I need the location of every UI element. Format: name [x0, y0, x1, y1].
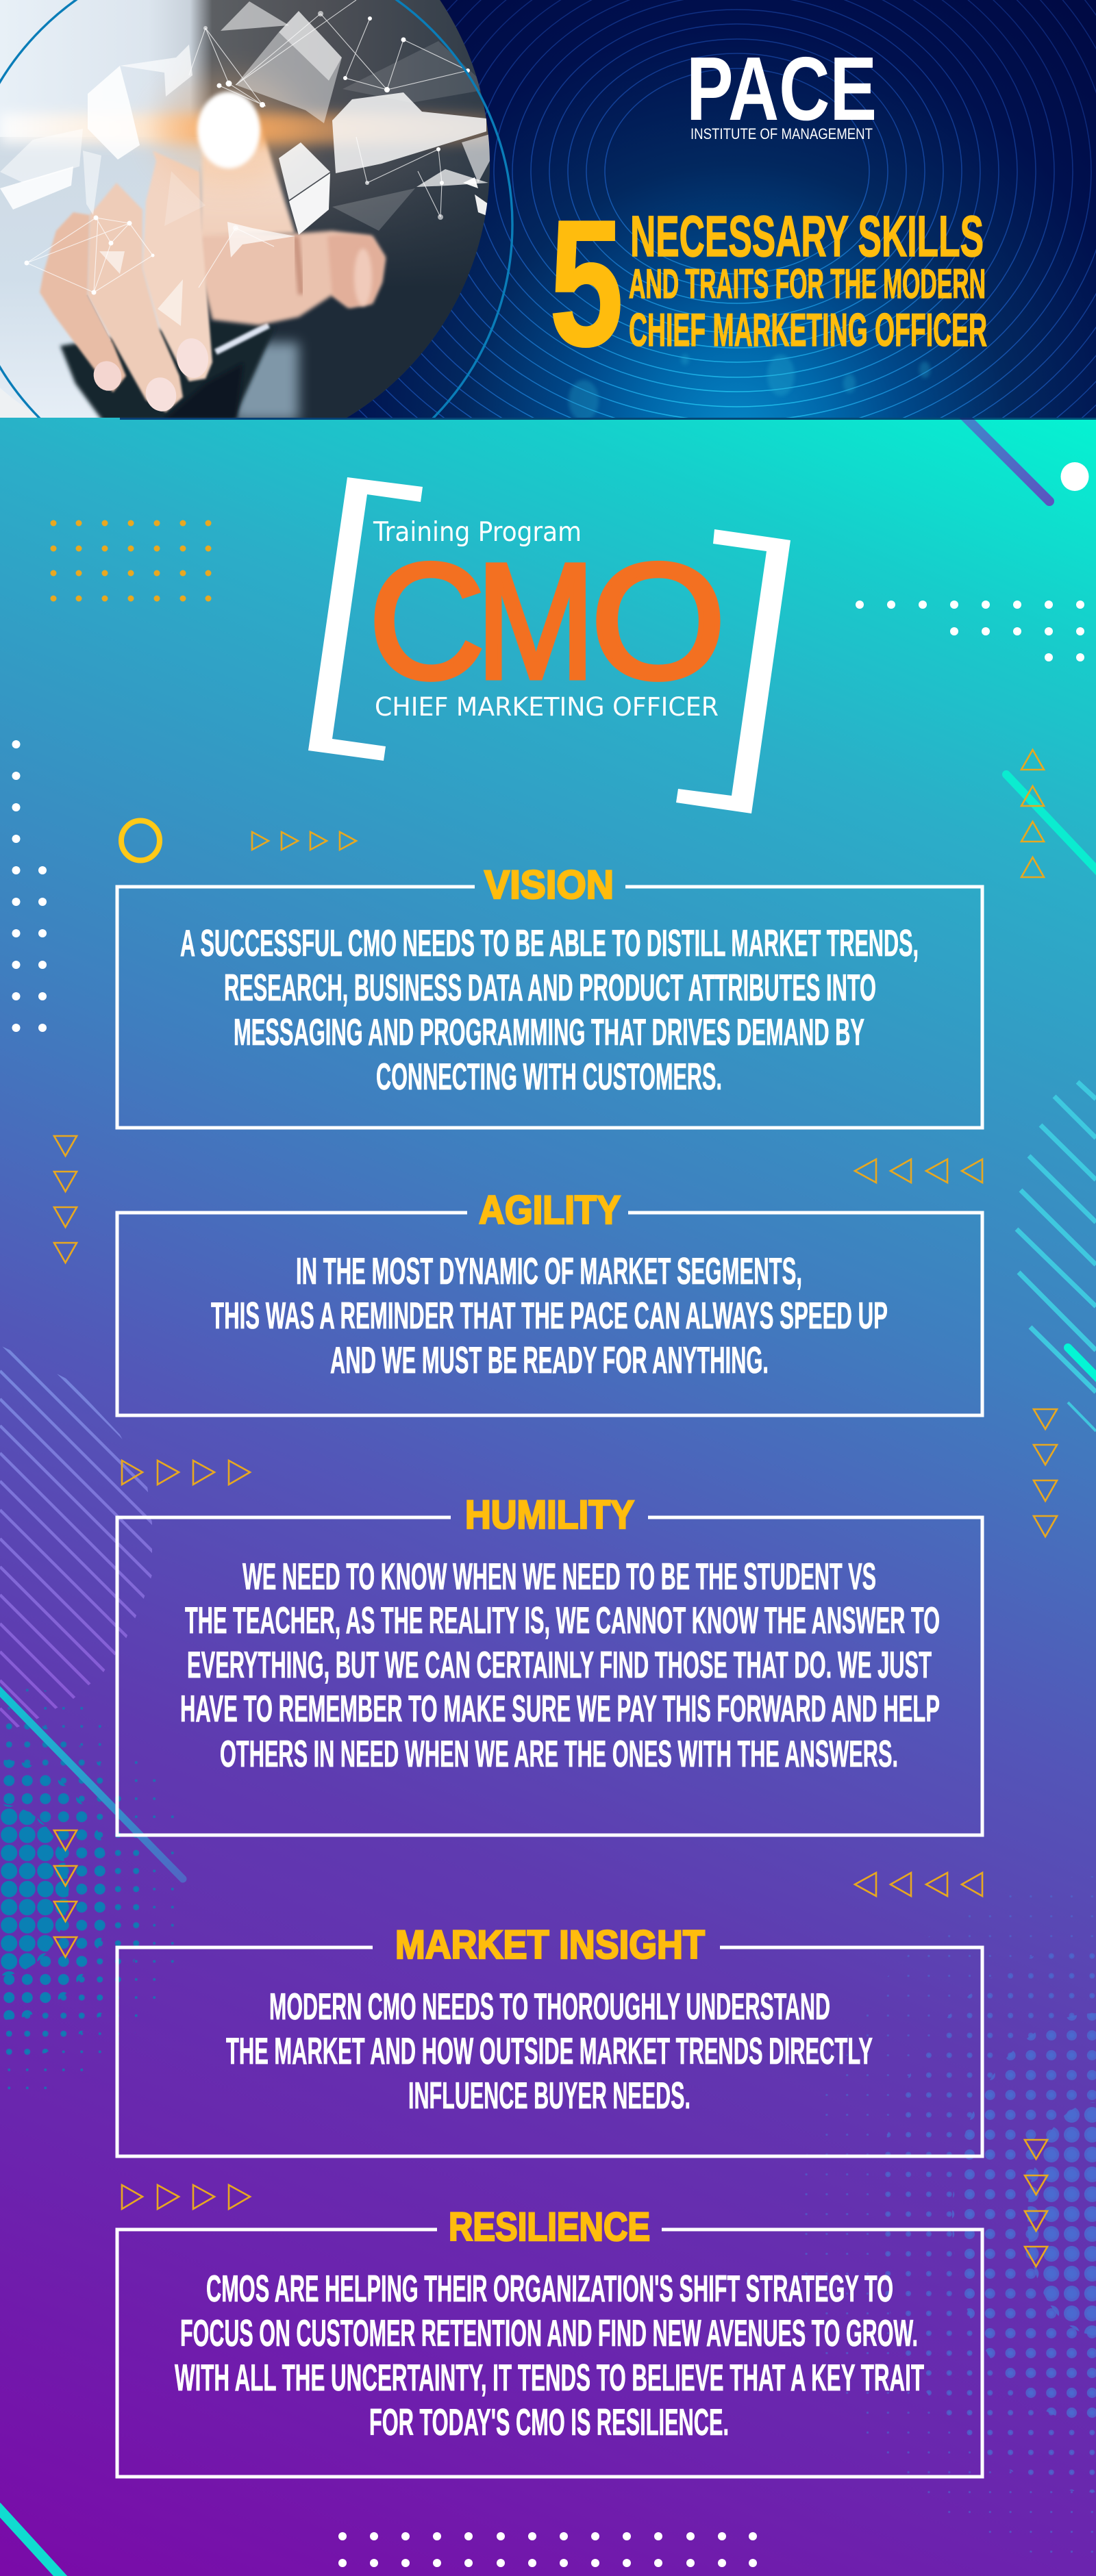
- text: vision body: [180, 922, 919, 1098]
- nails: [177, 338, 208, 378]
- dots: white rows bottom: [338, 2532, 757, 2567]
- concentric ring lines: [359, 0, 1096, 418]
- triangles: right pointing, lower: [122, 2185, 250, 2209]
- triangles: right pointing, top: [252, 832, 356, 850]
- hand: little finger: [40, 212, 126, 392]
- photo: hand touching digital network: [0, 0, 490, 418]
- panel: market insight: [117, 1923, 982, 2156]
- CMO lettering: O: [590, 529, 726, 713]
- triangles: down pointing, left upper: [54, 1136, 77, 1263]
- dots: white grid top right: [856, 601, 1084, 661]
- cuff: [216, 325, 269, 352]
- triangles: down pointing, right middle: [1034, 1409, 1057, 1537]
- panel: vision: [117, 863, 982, 1128]
- accent circle: white top right: [1060, 462, 1089, 491]
- hand: palm and thumb: [199, 231, 385, 325]
- triangles: left pointing, lower: [855, 1873, 982, 1896]
- text: humility body: [180, 1555, 940, 1775]
- triangles: left pointing, upper: [855, 1159, 982, 1183]
- accent line: teal upper right: [1006, 774, 1096, 876]
- triangles: down pointing, left lower: [54, 1830, 77, 1957]
- pale corner behind photo: [0, 0, 75, 418]
- dots: orange grid top left: [51, 520, 211, 601]
- panel: agility: [117, 1188, 982, 1415]
- thin teal ring around photo: [0, 0, 514, 418]
- heading: humility: HUMILITY: [465, 1493, 634, 1537]
- hand: ring finger: [88, 183, 183, 412]
- text: agility body: [211, 1250, 888, 1381]
- icon: yellow ring: [121, 820, 160, 860]
- CMO lettering: C: [369, 529, 485, 713]
- background decoration: halftone dots left: [0, 1684, 188, 2095]
- triangles: right pointing, middle: [122, 1461, 250, 1485]
- bokeh spots: [569, 354, 930, 421]
- accent line: blue diagonal left: [0, 1684, 183, 1879]
- title: 5 necessary skills: [549, 183, 987, 383]
- accent line: top right blue-purple: [959, 411, 1049, 501]
- logo: PACE Institute of Management: PACE: [686, 38, 877, 139]
- logo: PACE Institute of Management: INSTITUTE OF MANAGEMENT: [690, 125, 873, 142]
- header bottom rule: [120, 418, 1096, 420]
- light streak and glow: [0, 114, 493, 144]
- heading: resilience: RESILIENCE: [449, 2205, 650, 2249]
- hand: middle finger: [142, 151, 212, 381]
- accent line: teal short right: [1068, 1348, 1096, 1380]
- background decoration: diagonal stripes right: [1017, 1082, 1096, 1431]
- dots: white column left: [12, 740, 47, 1032]
- hand: index finger: [200, 131, 297, 236]
- heading: vision: VISION: [484, 863, 614, 907]
- heading: market insight: MARKET INSIGHT: [395, 1923, 705, 1967]
- text: market insight body: [226, 1985, 873, 2117]
- header background: [0, 0, 1096, 418]
- background decoration: diagonal stripes left: [0, 1346, 152, 1728]
- panel: resilience: [117, 2205, 982, 2477]
- text: market insight body: INFLUENCE BUYER NEEDS.: [408, 2074, 690, 2117]
- network lines: [27, 0, 468, 292]
- right bracket: [676, 529, 790, 813]
- panel: humility: [117, 1493, 982, 1835]
- background decoration: halftone dots right: [801, 1876, 1096, 2561]
- triangles: up pointing, right: [1021, 750, 1044, 877]
- CMO training program logo: [308, 477, 790, 813]
- header banner: [0, 0, 1096, 420]
- text: vision body: CONNECTING WITH CUSTOMERS.: [376, 1055, 722, 1098]
- CMO lettering: M: [476, 529, 595, 713]
- triangles: down pointing, right lower: [1025, 2140, 1047, 2266]
- text: resilience body: FOR TODAY'S CMO IS RESILIENCE.: [369, 2401, 729, 2443]
- training program label: Training Program: [373, 517, 582, 548]
- heading: agility: AGILITY: [479, 1188, 621, 1233]
- title: 5 necessary skills: 5: [549, 183, 623, 383]
- text: agility body: AND WE MUST BE READY FOR ANYTHING.: [330, 1339, 769, 1381]
- white polygons: [0, 1, 490, 326]
- chief marketing officer label: CHIEF MARKETING OFFICER: [375, 692, 719, 722]
- left bracket: [308, 477, 423, 761]
- text: resilience body: [175, 2267, 924, 2443]
- accent line: teal bottom left: [0, 2506, 68, 2576]
